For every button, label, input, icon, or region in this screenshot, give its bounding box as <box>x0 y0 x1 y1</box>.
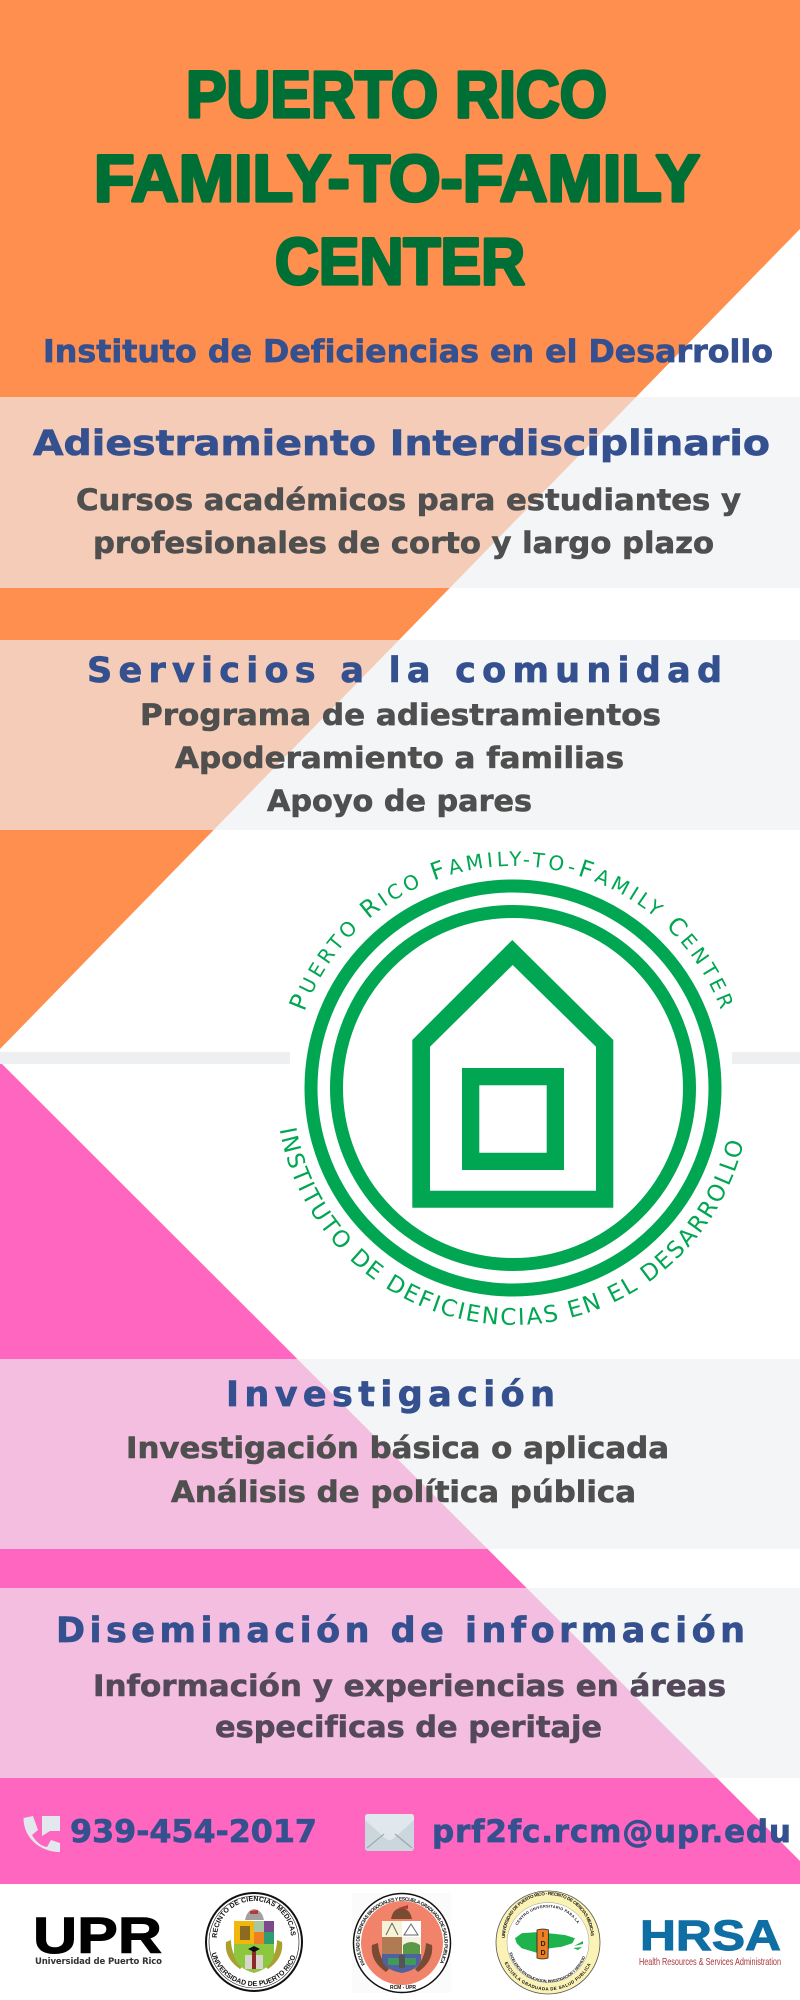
text block: investigacion <box>126 1431 669 1509</box>
logo top arc text: PUERTO RICO FAMILY-TO-FAMILY CENTER <box>288 851 732 1010</box>
text block: cursos: profesionales de corto y largo plazo <box>93 526 714 560</box>
text block: cursos <box>76 483 741 560</box>
icon: phone <box>24 1816 60 1852</box>
text block: servicios <box>140 698 661 818</box>
logo: Facultad de Ciencias Biosociales seal: FACULTAD DE CIENCIAS BIOSOCIALES Y ESCUELA GRADUADA DE SALUD PUBLICA <box>356 1897 448 1966</box>
title: PUERTO RICO <box>186 57 607 131</box>
text block: servicios: Apoyo de pares <box>267 784 532 818</box>
panel: Adiestramiento Interdisciplinario <box>0 397 800 588</box>
panel: Diseminación de información <box>0 1588 800 1778</box>
logo: IDD seal: CENTRO UNIVERSITARIO PARA LA <box>516 1904 579 1925</box>
title: FAMILY-TO-FAMILY <box>94 141 700 215</box>
title <box>94 57 700 298</box>
heading: Diseminación de información: Diseminación de información <box>56 1611 745 1651</box>
background: orange triangle <box>0 0 800 1049</box>
logo bottom arc text: INSTITUTO DE DEFICIENCIAS EN EL DESARROLLO <box>280 1128 742 1326</box>
icon: envelope <box>365 1814 414 1851</box>
logo: Recinto de Ciencias Médicas seal <box>205 1892 303 1992</box>
logo: IDD seal: EXCELENCIA EN EDUCACION, INVESTIGACION Y SERVICIO <box>510 1952 585 1983</box>
text block: diseminacion <box>93 1669 726 1744</box>
heading: Adiestramiento Interdisciplinario: Adiestramiento Interdisciplinario <box>33 424 770 464</box>
title: CENTER <box>275 224 525 298</box>
text block: servicios: Apoderamiento a familias <box>175 741 624 775</box>
logo: UPR: Universidad de Puerto Rico <box>35 1957 162 1967</box>
panel: Servicios a la comunidad <box>0 640 800 830</box>
logo: IDD seal: UNIVERSIDAD DE PUERTO RICO - RECINTO DE CIENCIAS MEDICAS <box>502 1892 594 1938</box>
logo: IDD seal: ESCUELA GRADUADA DE SALUD PUBLICA <box>504 1962 591 1991</box>
logo: IDD seal: I <box>542 1932 544 1939</box>
subtitle: Instituto de Deficiencias en el Desarrollo <box>43 334 773 370</box>
text block: investigacion: Investigación básica o aplicada <box>126 1431 669 1465</box>
background: pink band <box>0 1062 800 1884</box>
logo: IDD seal <box>496 1890 600 1994</box>
logo: Puerto Rico Family-to-Family Center emblem <box>280 851 742 1326</box>
contact bar <box>24 1814 791 1852</box>
heading: Investigación: Investigación <box>226 1375 555 1415</box>
logo: IDD seal: D <box>540 1950 546 1957</box>
logo: UPR: UPR <box>33 1907 162 1964</box>
phone number: 939-454-2017 <box>70 1814 317 1850</box>
logo: Facultad de Ciencias Biosociales seal <box>352 1892 452 1994</box>
logo: Recinto de Ciencias Médicas seal: RECINTO DE CIENCIAS MEDICAS <box>212 1896 296 1938</box>
text block: cursos: Cursos académicos para estudiantes y <box>76 483 741 517</box>
logo: Recinto de Ciencias Médicas seal: UNIVERSIDAD DE PUERTO RICO <box>212 1952 295 1986</box>
logo house <box>412 940 613 1208</box>
heading: Servicios a la comunidad: Servicios a la comunidad <box>87 651 722 691</box>
logo: Facultad de Ciencias Biosociales seal: RCM - UPR <box>390 1985 416 1991</box>
text block: diseminacion: Información y experiencias en áreas <box>93 1669 726 1703</box>
text block: diseminacion: especificas de peritaje <box>215 1710 602 1744</box>
text block: investigacion: Análisis de política pública <box>171 1475 636 1509</box>
logo: IDD seal: D <box>540 1941 546 1948</box>
text block: servicios: Programa de adiestramientos <box>140 698 661 732</box>
panel: Investigación <box>0 1359 800 1549</box>
logo rings <box>311 886 715 1290</box>
email: prf2fc.rcm@upr.edu <box>432 1814 791 1850</box>
logo: HRSA: HRSA <box>640 1912 781 1960</box>
divider band <box>0 1052 800 1064</box>
